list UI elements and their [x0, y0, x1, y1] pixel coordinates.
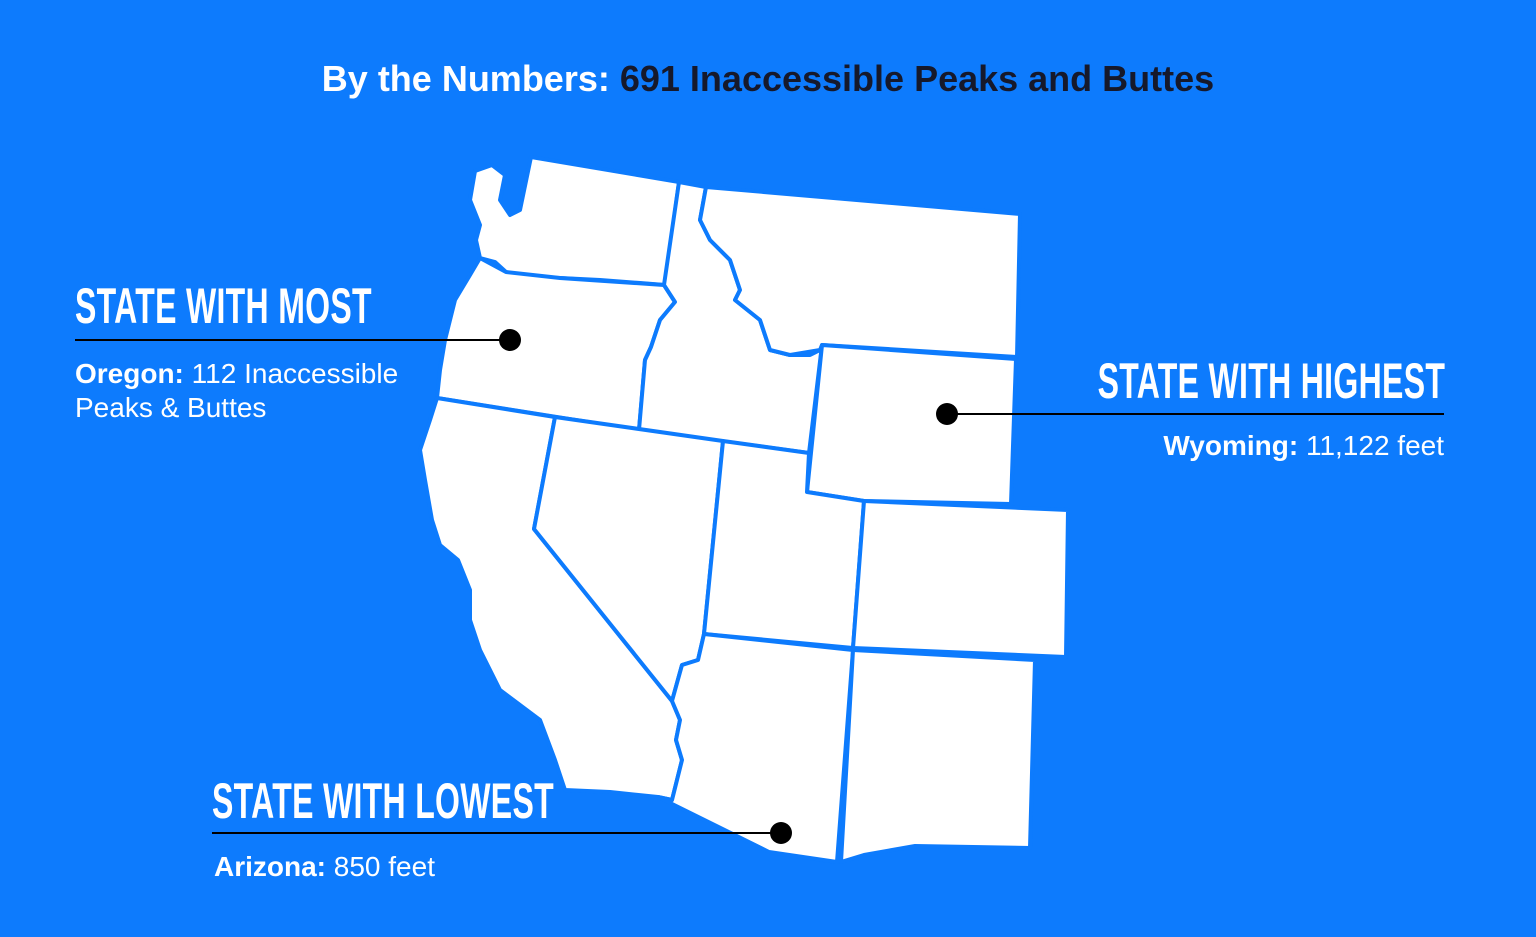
- state: California: [420, 398, 682, 800]
- state: Wyoming: [807, 345, 1016, 504]
- text: Arizona: Arizona: 850 feet: [214, 851, 435, 882]
- state: Nevada: [534, 417, 723, 701]
- state: Montana: [700, 187, 1020, 357]
- leader line with dot: [75, 339, 510, 341]
- heading: state with highest: STATE WITH HIGHEST: [1097, 353, 1445, 409]
- text: Oregon: Oregon: 112 Inaccessible: [75, 358, 398, 389]
- state: Colorado: [853, 501, 1068, 657]
- state: Oregon: [437, 258, 675, 430]
- heading: state with lowest: STATE WITH LOWEST: [212, 773, 554, 829]
- heading: state with most: STATE WITH MOST: [75, 278, 372, 334]
- state: New Mexico: [841, 650, 1035, 862]
- state: Idaho: [639, 182, 822, 453]
- callout: state with most: [75, 278, 521, 423]
- state: Utah: [704, 441, 864, 648]
- state: Arizona: [658, 634, 853, 862]
- callout: state with lowest: [212, 773, 792, 882]
- leader line with dot: [212, 832, 781, 834]
- title: By the Numbers: 691 Inaccessible Peaks and Buttes: [322, 58, 1214, 99]
- text: Oregon: [75, 358, 398, 423]
- text: Oregon: Peaks & Buttes: [75, 392, 266, 423]
- text: Wyoming: Wyoming: 11,122 feet: [1163, 430, 1444, 461]
- leader line with dot: [947, 413, 1444, 415]
- state: Washington: [470, 157, 679, 285]
- callout: state with highest: [936, 353, 1445, 461]
